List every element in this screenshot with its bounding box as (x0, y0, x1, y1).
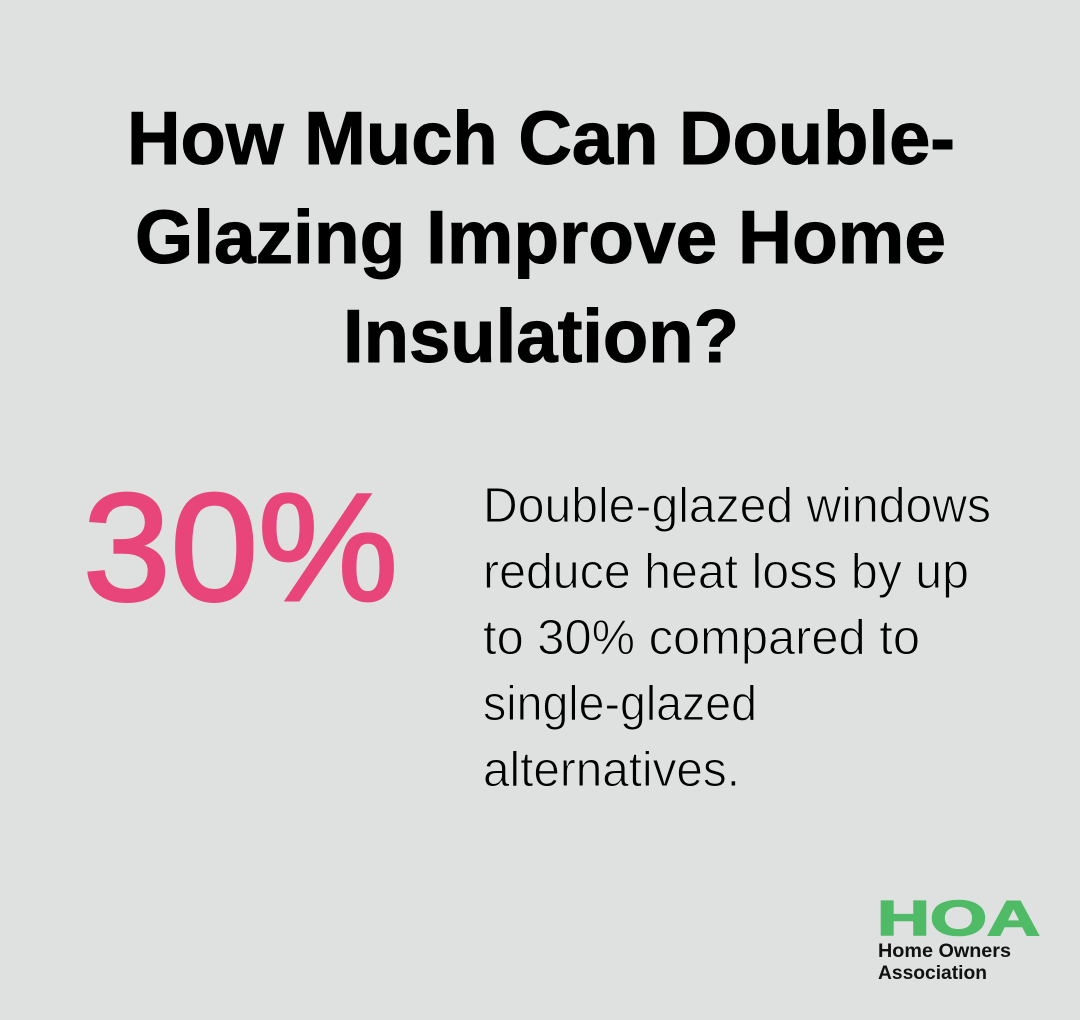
logo: HOA Home Owners Association: Association (878, 963, 987, 984)
title: How Much Can Double- (127, 96, 955, 180)
title: Insulation? (343, 294, 739, 378)
logo: HOA Home Owners Association (877, 892, 1040, 984)
title (127, 96, 955, 378)
description text (483, 479, 991, 797)
description text: alternatives. (483, 743, 740, 797)
logo: HOA Home Owners Association: Home Owners (878, 941, 1011, 962)
statistic: 30%: 30% (83, 462, 398, 633)
title: Glazing Improve Home (135, 195, 946, 279)
description text: Double-glazed windows (483, 479, 991, 533)
description text: reduce heat loss by up (483, 545, 969, 599)
logo: HOA Home Owners Association: HOA (877, 892, 1040, 946)
description text: single-glazed (483, 677, 757, 731)
description text: to 30% compared to (483, 611, 920, 665)
